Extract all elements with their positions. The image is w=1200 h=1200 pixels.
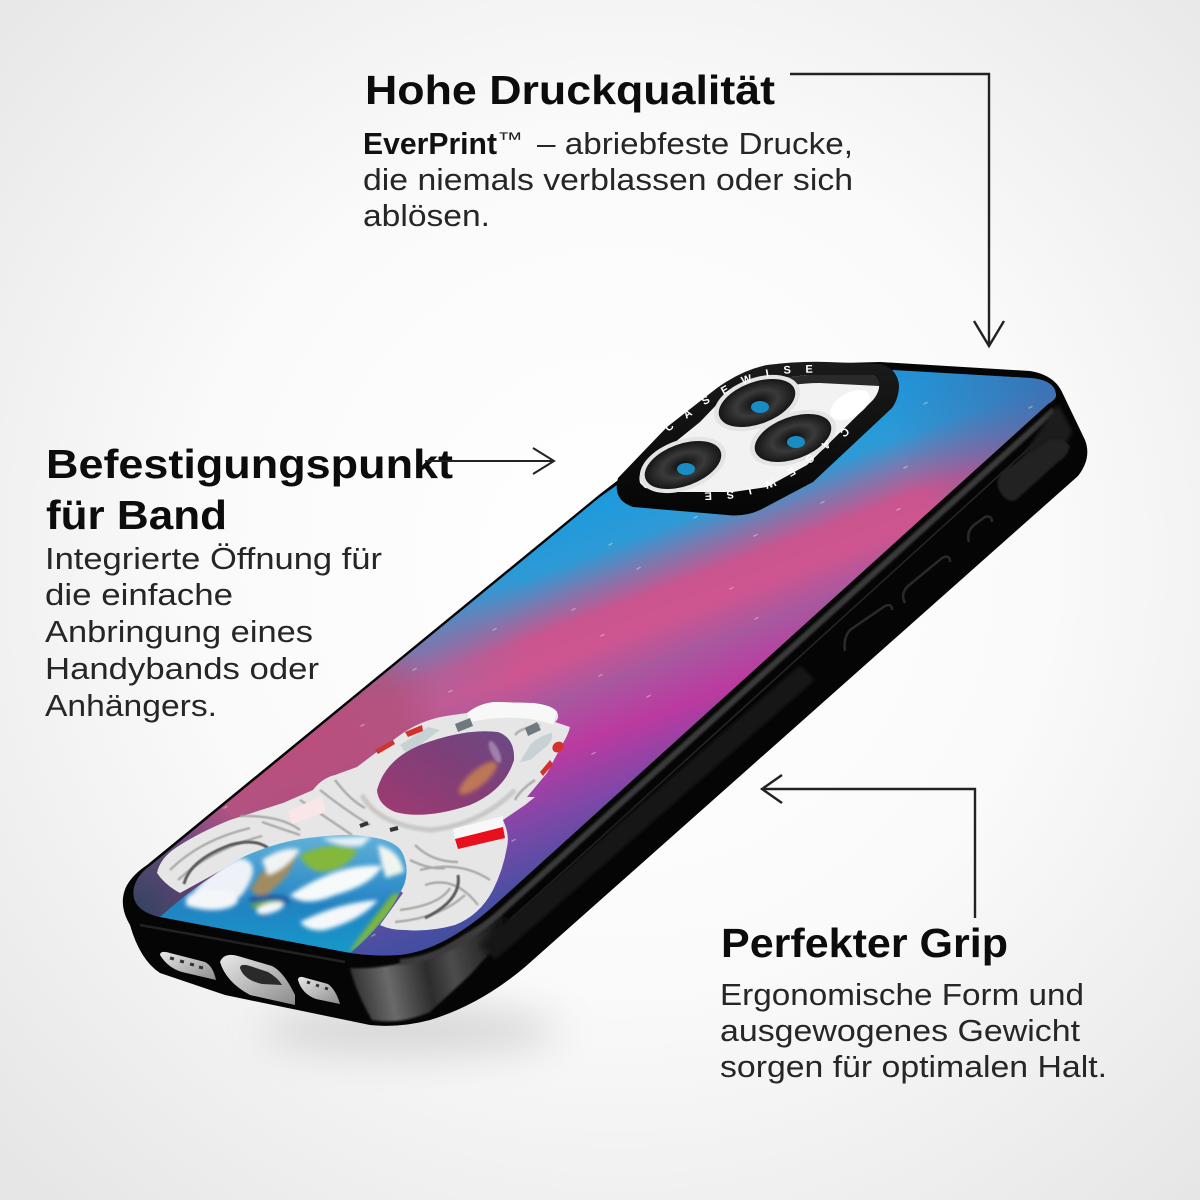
text block: EverPrint: ™ [497, 129, 523, 151]
chest straps [360, 823, 398, 830]
case body [123, 362, 1087, 1026]
speckled side texture [480, 665, 815, 960]
camera island [616, 362, 899, 516]
bright upper suit [467, 702, 557, 725]
text block: Ergonomische Form [720, 977, 1107, 1084]
left speaker grille [160, 952, 216, 980]
text block: Öffnung: Anbringung eines [45, 614, 313, 649]
earth globe [160, 835, 407, 953]
text block: Öffnung: Anhängers. [45, 688, 217, 723]
text block: EverPrint: EverPrint [363, 126, 497, 161]
shoulder controls [400, 718, 552, 762]
chrome reflection on corner [350, 912, 515, 1021]
suit [157, 702, 570, 930]
side buttons [845, 517, 992, 651]
heading: Befestigungspunkt für Band: Befestigungspunkt [46, 441, 453, 487]
text block: Öffnung: die einfache [45, 577, 233, 612]
text block: EverPrint: – abriebfeste Drucke, [537, 126, 853, 161]
visor [377, 731, 514, 815]
red accents [375, 725, 566, 776]
text block: Öffnung: Integrierte Öffnung für [45, 541, 382, 576]
island frame [617, 362, 899, 515]
glove shadow right [425, 875, 458, 918]
stars [224, 402, 1032, 936]
text block: EverPrint [363, 126, 853, 233]
back panel gradient [134, 370, 1056, 956]
arrow: print quality [790, 74, 1004, 346]
lens: right [742, 399, 844, 477]
text block: Ergonomische Form: sorgen für optimalen Halt. [720, 1049, 1107, 1084]
text block: Ergonomische Form: ausgewogenes Gewicht [720, 1013, 1080, 1048]
astronaut figure [157, 702, 570, 930]
rim highlight line [140, 925, 345, 962]
right speaker grille [298, 977, 340, 1004]
text block: EverPrint: die niemals verblassen oder sich [363, 162, 853, 197]
window dark top strip [760, 375, 879, 392]
island window [639, 375, 879, 492]
top corner side shading [1008, 404, 1072, 478]
wrinkles [170, 725, 540, 922]
highlight [825, 384, 875, 426]
brand text top: CASEWISE [666, 365, 812, 430]
text block: Ergonomische Form: Ergonomische Form und [720, 977, 1084, 1012]
heading: Befestigungspunkt für Band: für Band [46, 492, 227, 538]
arrow: strap attachment [425, 448, 554, 474]
lens: top [706, 364, 808, 442]
text block: Öffnung: Handybands oder [45, 651, 319, 686]
brand text bottom: CASEWISE [704, 428, 849, 500]
rim bevel along long edge [400, 410, 1054, 962]
ground shadow [260, 1006, 560, 1054]
glove shadow left [184, 842, 268, 884]
heading: Befestigungspunkt für Band [46, 441, 453, 538]
collar shading [362, 790, 515, 830]
text block: EverPrint: ablösen. [363, 198, 490, 233]
heading: Perfekter Grip: Perfekter Grip [721, 920, 1008, 966]
text block: Öffnung [45, 541, 382, 723]
flag patch [453, 816, 505, 849]
arrow: grip [762, 775, 975, 918]
strap attachment point [997, 439, 1070, 501]
lens: left [632, 426, 734, 504]
heading: Hohe Druckqualität: Hohe Druckqualität [365, 67, 775, 113]
charging port [220, 955, 295, 1005]
groove along side [510, 420, 1060, 920]
phone case illustration [122, 362, 1088, 1067]
name patch [288, 796, 326, 824]
